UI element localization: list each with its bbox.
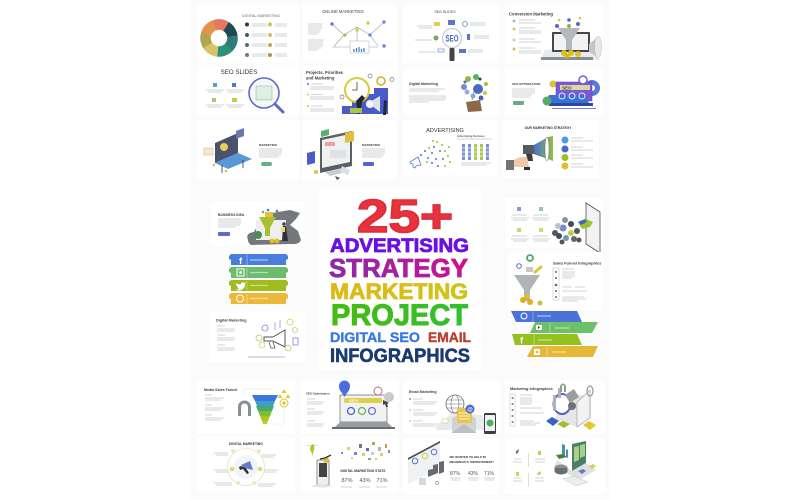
panel: conversion marketing slide [505, 5, 603, 63]
bar chart [457, 139, 492, 165]
background panel [190, 0, 610, 500]
panel: sales funnel slide [508, 252, 603, 310]
ribbon: instagram [527, 346, 598, 357]
heading: online marketing: ONLINE MARKETING [322, 9, 364, 14]
illustration: SEO laptop: SEO [562, 85, 572, 90]
heading: digital marketing: Digital Marketing [409, 82, 438, 86]
heading: conversion marketing: Conversion Marketing [509, 12, 553, 16]
button [513, 101, 524, 105]
panel: SEO optimization screen slide [505, 68, 603, 116]
illustration: isometric laptop and pie [554, 441, 596, 486]
heading: digital marketing: DIGITAL MARKETING [242, 14, 280, 18]
network chart [330, 20, 386, 53]
illustration: growing plant icons [461, 74, 488, 112]
icon cloud [341, 442, 390, 460]
panel: digital marketing donut slide [197, 5, 299, 63]
heading: SEO optimization: SEO Optimization [306, 392, 330, 396]
illustration: laptop dashboard: SEO [349, 398, 359, 404]
legend dots [245, 22, 287, 57]
panel: business idea slide [212, 202, 304, 246]
funnel chart [252, 395, 278, 424]
icon list [510, 394, 515, 426]
illustration: isometric megaphone dashboard [546, 384, 596, 430]
illustration: tablet and gears [552, 203, 600, 253]
illustration: outline megaphone [248, 319, 298, 357]
panel: meaningful improvement slide [403, 439, 499, 494]
stat: 87%: 87% [341, 478, 353, 484]
heading: sales funnel: Sales Funnel Infographics [553, 260, 601, 266]
panel: isometric laptop icons slide [505, 439, 605, 494]
button [363, 162, 374, 166]
illustration: globe envelope phone: @ [467, 407, 473, 413]
heading: SEO slides: SEO SLIDES [434, 10, 456, 14]
text block [205, 395, 224, 420]
icon grid [511, 207, 550, 241]
text block [218, 219, 241, 227]
stat: 43%: 43% [359, 478, 371, 484]
panel: email marketing slide [403, 380, 500, 434]
panel: digital marketing stats slide [301, 437, 398, 492]
ribbon: twitter [229, 280, 288, 291]
ribbon: instagram [229, 267, 288, 278]
panel: digital marketing coins slide [403, 68, 499, 116]
ribbon: whatsapp [511, 311, 582, 322]
donut chart [202, 21, 236, 55]
panel: SEO slides hub slide [403, 5, 499, 63]
icon: magnet [238, 400, 251, 416]
icon: target dots [278, 389, 290, 407]
text block [409, 398, 437, 426]
illustration: isometric monitor [307, 129, 354, 180]
illustration: isometric laptop [204, 128, 252, 173]
button [218, 232, 230, 236]
heading: advertising: ADVERTISING [426, 128, 464, 134]
heading: digital marketing stats: DIGITAL MARKETING STATS [340, 469, 386, 473]
illustration: clock and megaphone [340, 74, 394, 115]
title: infographics: INFOGRAPHICS [330, 346, 470, 367]
satellite icons [415, 20, 489, 53]
heading: marketing infographics: Marketing Infographics [510, 386, 553, 391]
text block [512, 89, 535, 97]
heading: SEO optimization: SEO OPTIMIZATION [512, 82, 540, 86]
strategy list [562, 136, 593, 170]
heading: improvement: WE WANTED TO HELP IN [450, 455, 486, 459]
feature icons [206, 83, 244, 107]
panel: media sales funnel slide [197, 380, 295, 434]
panel: main title card [318, 189, 482, 370]
panel: marketing laptop slide [197, 120, 299, 180]
title: advertising: ADVERTISING [330, 235, 469, 257]
heading: improvement: MEANINGFUL IMPROVEMENT! [450, 460, 494, 464]
heading: email marketing: Email Marketing [409, 390, 437, 394]
icon list [553, 268, 559, 300]
illustration: megaphone dot cloud [410, 140, 451, 168]
ribbon: whatsapp [229, 293, 288, 304]
title: digital seo: DIGITAL SEO [330, 329, 420, 345]
social ribbons right [511, 311, 598, 357]
heading: media sales funnel: Media Sales Funnel [204, 388, 237, 392]
heading: projects priorities: and Marketing [306, 76, 335, 80]
title: 25+: 25+ [357, 190, 453, 242]
panel: digital marketing outline slide [210, 312, 305, 362]
icon grid [513, 449, 545, 487]
heading: SEO slides: SEO SLIDES [221, 69, 257, 76]
ribbon: facebook: f [239, 256, 243, 267]
panel: our marketing strategy slide [503, 120, 599, 178]
illustration: funnel monitor megaphone [541, 17, 602, 60]
heading: marketing strategy: OUR MARKETING STRATEGY [525, 126, 572, 130]
illustration: kiosk with person [306, 444, 332, 488]
heading: business idea: BUSINESS IDEA [218, 213, 245, 217]
text block [217, 326, 235, 350]
stat: 71%: 71% [484, 471, 495, 477]
stat: 71%: 71% [376, 478, 388, 484]
heading: digital marketing: Digital Marketing [216, 318, 247, 322]
illustration: hand holding megaphone [506, 136, 553, 170]
panel: product icon grid slide [505, 198, 603, 253]
connector lines [244, 389, 284, 424]
panel: online marketing network slide [303, 5, 397, 63]
heading: chart title: Advertising Services [457, 134, 485, 138]
illustration: funnel and person [247, 209, 301, 245]
panel: marketing monitor slide [303, 120, 397, 180]
social ribbons left [229, 254, 288, 304]
text block [512, 20, 541, 53]
illustration: isometric wall and charts [408, 441, 444, 485]
panel: advertising slide [403, 120, 497, 176]
illustration: funnel [514, 255, 542, 306]
heading: digital marketing: DIGITAL MARKETING [229, 442, 263, 446]
heading: marketing: MARKETING [259, 143, 278, 147]
text block [362, 149, 385, 157]
title: strategy: STRATEGY [329, 253, 468, 283]
panel: marketing infographics slide [505, 380, 605, 434]
icon: magnifier [249, 78, 283, 112]
text block [307, 83, 334, 111]
title: email: EMAIL [428, 329, 471, 345]
stat: 43%: 43% [468, 471, 479, 477]
heading: marketing: MARKETING [362, 143, 381, 147]
button [261, 162, 272, 166]
ribbon: youtube [530, 322, 598, 333]
panel: SEO optimization laptop slide [301, 380, 398, 434]
cycle diagram [214, 448, 278, 486]
panel: projects priorities slide [303, 65, 397, 117]
text block [259, 149, 282, 157]
title: marketing: MARKETING [330, 279, 468, 304]
icon: SEO magnifier: SEO [446, 34, 458, 44]
text block [409, 89, 446, 102]
title: project: PROJECT [331, 299, 468, 332]
text block [520, 395, 544, 425]
panel: digital marketing circle slide [197, 437, 295, 492]
heading: projects priorities: Projects, Priorities [306, 70, 344, 75]
stat: 87%: 87% [450, 471, 461, 477]
ribbon: facebook: f [520, 336, 524, 346]
text block [562, 269, 587, 301]
text block [308, 24, 324, 50]
panel: SEO slides magnifier slide [197, 65, 299, 117]
text block [307, 399, 324, 426]
